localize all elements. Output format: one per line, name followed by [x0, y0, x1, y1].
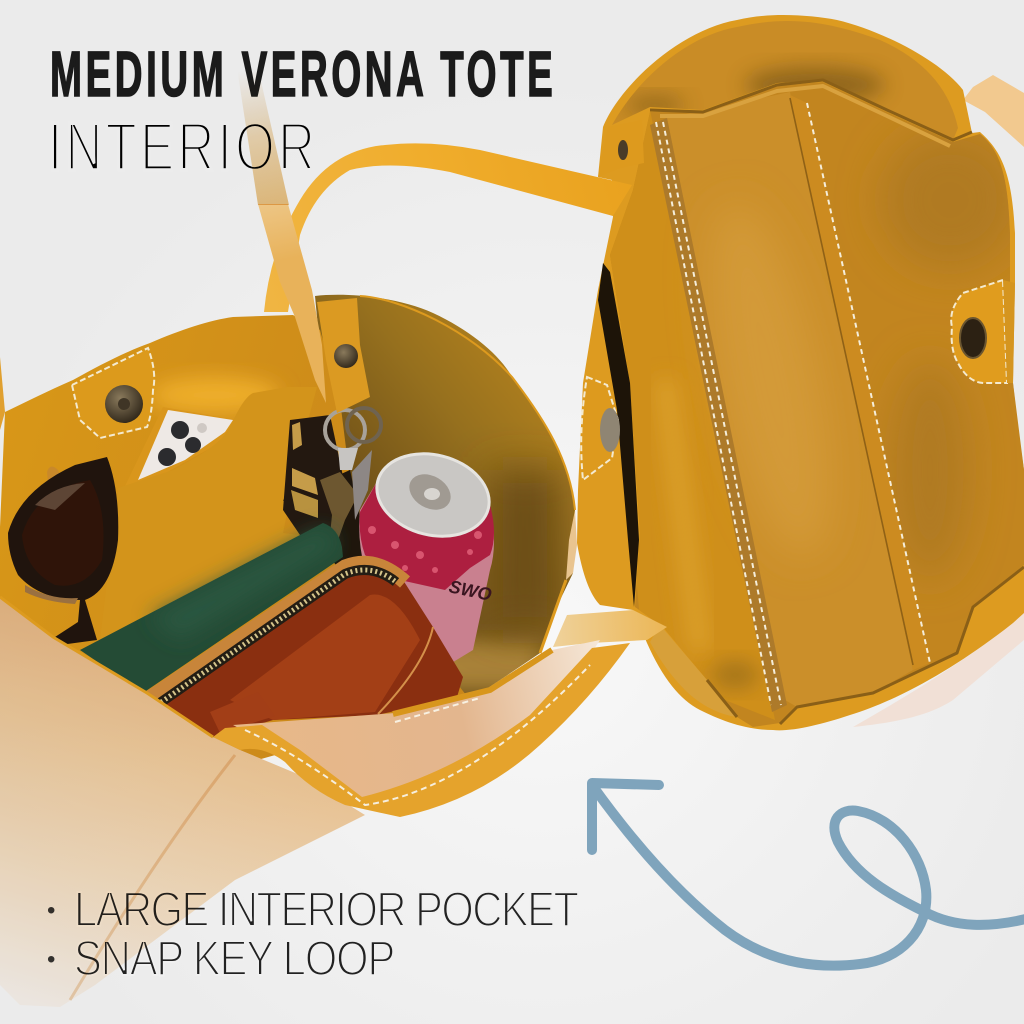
far left strap sliver	[0, 357, 5, 430]
left bag side fold	[70, 755, 235, 1000]
pocket snap tab	[72, 348, 154, 438]
left bag: tote with contents	[0, 68, 632, 1007]
right tab with snap	[951, 280, 1015, 383]
upright strap stub	[258, 204, 326, 403]
arrow: blue curl pointing to the bag interior	[592, 783, 1024, 966]
left tab with snap	[581, 377, 620, 480]
heading	[48, 39, 553, 185]
pocket slit	[598, 263, 639, 607]
raspberry lighter speckle	[368, 526, 482, 573]
top tab with snap	[598, 120, 644, 177]
raspberry soda can	[359, 442, 498, 670]
zipper tape	[150, 563, 405, 698]
right bag: open top-down interior	[553, 10, 1024, 740]
left bag inner wall	[0, 315, 470, 765]
left wall	[600, 110, 775, 720]
bullet: large interior pocket: LARGE INTERIOR POCKET	[74, 882, 579, 937]
title: MEDIUM VERONA TOTE	[50, 39, 553, 111]
right bag upper flap	[612, 21, 958, 138]
lighter center glow	[713, 218, 827, 542]
right bag thin seam	[790, 98, 913, 665]
lower shadow	[711, 661, 759, 689]
left bag rim	[0, 597, 213, 737]
right bag light strap loop	[553, 610, 667, 647]
left bag back wall interior	[315, 294, 575, 694]
left bag front strap	[213, 643, 630, 817]
left bag front exterior panel	[0, 597, 365, 1007]
pouch lobe edge	[378, 627, 433, 714]
right bag lower left bowl	[650, 625, 737, 717]
right side seam strip	[566, 510, 577, 580]
panel base hiding contents below rim, stopping above the bullet text	[0, 597, 365, 880]
right bag gathered rim	[650, 80, 1024, 724]
left seam band	[650, 118, 787, 712]
bullet dot one: •	[47, 897, 55, 924]
right bag far strap	[963, 75, 1024, 147]
arrow shaft	[592, 785, 1024, 966]
left bag back handle	[264, 143, 632, 312]
can label: SWO	[447, 576, 493, 605]
snap key loop strap	[317, 298, 370, 413]
keys and rings	[320, 408, 381, 540]
right bag stitch lines	[656, 103, 930, 705]
subtitle: INTERIOR	[48, 109, 315, 185]
front strap stitching	[245, 665, 590, 805]
center panel	[667, 92, 913, 707]
arrow head	[592, 783, 659, 850]
bullet dot two: •	[47, 946, 55, 973]
feature list	[47, 882, 579, 986]
right bag exterior sliver	[853, 612, 1024, 727]
bullet: snap key loop: SNAP KEY LOOP	[74, 931, 395, 986]
pocket rim suede	[393, 650, 552, 714]
lower right lip	[780, 565, 1024, 728]
pouch flap	[210, 692, 275, 733]
right seam band	[790, 95, 930, 670]
right bag interior floor	[600, 70, 1024, 740]
rim stitches	[395, 698, 480, 722]
car key fob	[283, 415, 348, 540]
pocket front panel	[100, 387, 340, 640]
right bag light rim ridge	[660, 86, 950, 146]
right bag outer rim	[577, 15, 1024, 730]
right side rim edge	[540, 580, 566, 653]
dark gap behind contents	[283, 470, 370, 570]
phone in pocket	[125, 407, 238, 490]
wall crease	[665, 380, 700, 650]
green notebook	[80, 523, 343, 693]
back wall bright rim	[360, 296, 575, 510]
sunglasses	[8, 457, 118, 645]
suede glow behind phone	[150, 377, 280, 413]
left bag right exterior panel	[233, 640, 600, 805]
upright strap top fading behind heading	[237, 68, 289, 205]
red leather zip pouch	[148, 560, 463, 738]
notebook highlight	[150, 528, 338, 640]
